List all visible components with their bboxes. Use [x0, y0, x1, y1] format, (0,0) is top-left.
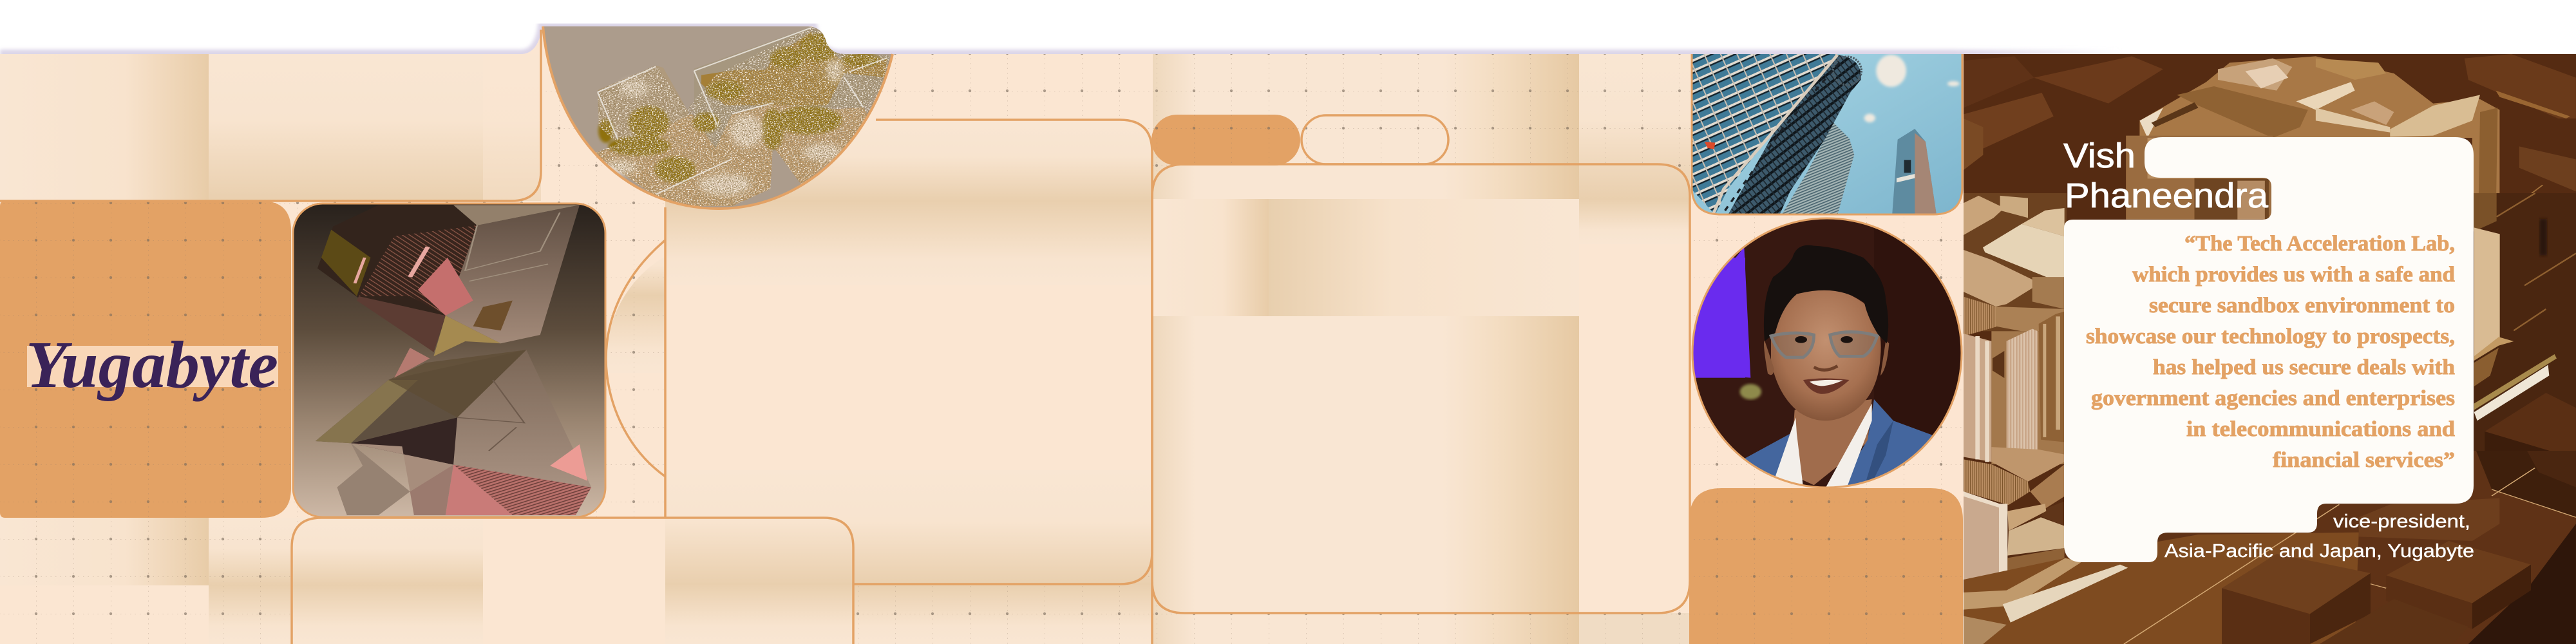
- cube two: [2386, 541, 2531, 603]
- quote text: government agencies and enterprises: [2091, 386, 2455, 410]
- cube one: [2222, 554, 2371, 614]
- lavender bar shadow: [0, 26, 2122, 54]
- chip: right edge: [2474, 193, 2576, 451]
- white highlights: [603, 59, 843, 195]
- skyscraper outline: [1692, 54, 1962, 214]
- dotted grid: [0, 54, 1962, 644]
- bokeh: [1740, 384, 1761, 399]
- speckle overlay: [593, 27, 889, 206]
- quote text: “The Tech Acceleration Lab,: [2184, 232, 2455, 256]
- name: [2063, 137, 2269, 215]
- job title: vice-president,: [2333, 511, 2470, 532]
- photo: glass cubes: [293, 204, 605, 517]
- jacket: [1745, 399, 1932, 485]
- gold patches: [598, 33, 880, 182]
- quote card: [2064, 137, 2474, 562]
- chip: bottom board and cubes: [1964, 451, 2576, 644]
- quote text: showcase our technology to prospects,: [2086, 325, 2455, 348]
- face: [1771, 287, 1881, 421]
- upper cube: [317, 205, 459, 352]
- portrait: Vish Phaneendra: [1694, 219, 1960, 487]
- nose and smile: [1814, 366, 1837, 370]
- red flag: [1705, 142, 1715, 149]
- quote text: has helped us secure deals with: [2153, 355, 2455, 379]
- neck: [1790, 399, 1872, 485]
- job title: [2164, 511, 2474, 562]
- quote text: secure sandbox environment to: [2149, 294, 2455, 317]
- shirt: [1776, 404, 1872, 489]
- photo: skyscrapers: [1691, 53, 1963, 220]
- portrait outline: [1692, 218, 1962, 488]
- name: Phaneendra: [2065, 176, 2269, 215]
- chip: top region: [1964, 54, 2576, 232]
- background photo: circuit chip: [1964, 54, 2576, 644]
- glasses: [1771, 332, 1877, 357]
- round tower: [1728, 55, 1861, 214]
- structure behind name: [2126, 136, 2273, 220]
- lower cube: [316, 380, 491, 443]
- job title: Asia-Pacific and Japan, Yugabyte: [2164, 541, 2474, 562]
- glass and crystal mass: [598, 66, 688, 140]
- purple screen: [1736, 248, 1750, 378]
- hair: [1764, 245, 1888, 343]
- logo: [26, 328, 278, 402]
- name: Vish: [2063, 137, 2136, 175]
- logo highlight: [27, 346, 278, 387]
- quote text: [2086, 232, 2455, 472]
- quote text: in telecommunications and: [2186, 417, 2455, 441]
- photo: gold crystal blocks: [541, 26, 902, 213]
- main facade: [1691, 53, 1837, 214]
- logo wordmark: Yugabyte: [26, 328, 278, 402]
- right tower: [1892, 129, 1937, 214]
- clouds: [1864, 55, 1960, 122]
- quote text: which provides us with a safe and: [2132, 263, 2455, 287]
- page background: [0, 26, 1964, 644]
- orange lower card: [1689, 488, 1963, 644]
- gold photo outline: [543, 26, 893, 209]
- cube photo outline: [293, 204, 605, 517]
- quote text: financial services”: [2273, 448, 2455, 472]
- back tower: [1782, 122, 1854, 214]
- orange filled pill: [1151, 115, 1300, 166]
- orange logo card: [0, 201, 291, 518]
- panel outlines: [0, 30, 1690, 644]
- chip: left structure: [1964, 193, 2067, 580]
- central structure: [2139, 56, 2500, 193]
